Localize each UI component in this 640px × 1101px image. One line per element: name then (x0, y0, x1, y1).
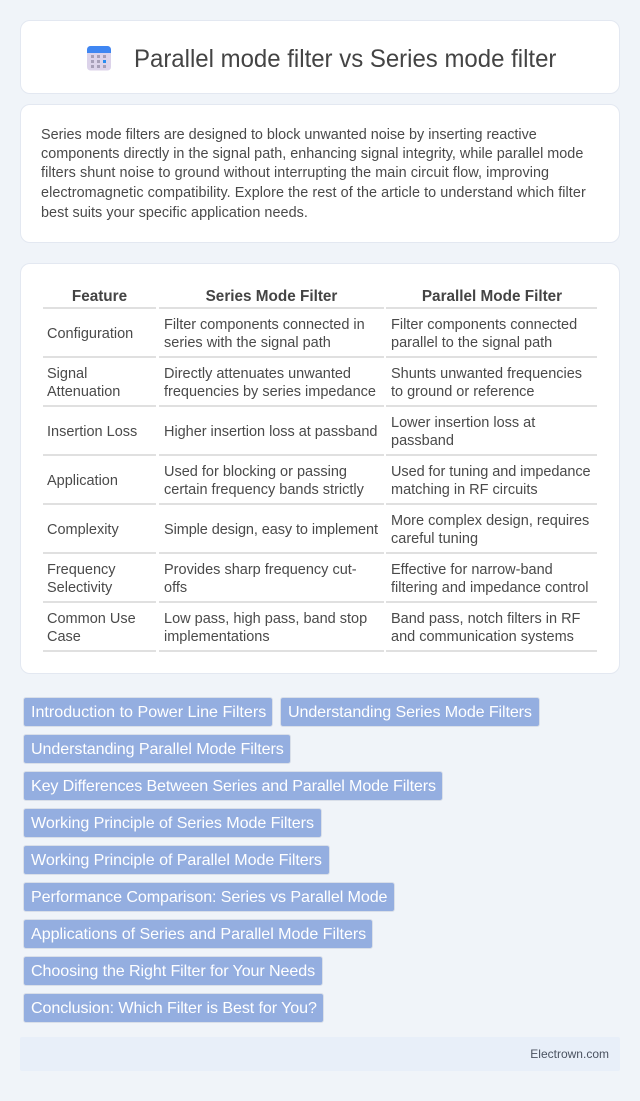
text: Insertion Loss (47, 424, 137, 440)
text: components directly in the signal path, enhancing signal integrity, while parallel mode (41, 146, 583, 162)
footer bar (20, 1037, 620, 1071)
text: to ground or reference (391, 384, 534, 400)
text: careful tuning (391, 531, 478, 547)
text: Application (47, 473, 118, 489)
title: Parallel mode filter vs Series mode filter (134, 45, 556, 73)
text: Working Principle of Parallel Mode Filters (31, 851, 322, 869)
text: Higher insertion loss at passband (164, 424, 377, 440)
text: Understanding Parallel Mode Filters (31, 740, 284, 758)
text: Shunts unwanted frequencies (391, 366, 582, 382)
table headers (72, 288, 562, 305)
text: series with the signal path (164, 335, 331, 351)
text: Band pass, notch filters in RF (391, 611, 580, 627)
text: Performance Comparison: Series vs Parallel Mode (31, 888, 387, 906)
text: Parallel Mode Filter (422, 288, 562, 305)
text: electromagnetic compatibility. Explore the rest of the article to understand which filter (41, 185, 586, 201)
text: Simple design, easy to implement (164, 522, 378, 538)
table rules (43, 307, 597, 652)
panel: comparison table (20, 263, 620, 674)
text: Configuration (47, 326, 133, 342)
text: filters shunt noise to ground without interrupting the main circuit flow, improving (41, 165, 549, 181)
text: Filter components connected (391, 317, 577, 333)
text: Introduction to Power Line Filters (31, 703, 266, 721)
text: matching in RF circuits (391, 482, 538, 498)
text: Low pass, high pass, band stop (164, 611, 367, 627)
text: passband (391, 433, 454, 449)
panel: intro (20, 104, 620, 243)
text: Series Mode Filter (206, 288, 337, 305)
topic tag list (23, 697, 540, 1023)
text: Feature (72, 288, 127, 305)
table row: Insertion Loss (47, 415, 536, 449)
text: Key Differences Between Series and Parallel Mode Filters (31, 777, 436, 795)
text: Lower insertion loss at (391, 415, 535, 431)
text: certain frequency bands strictly (164, 482, 364, 498)
table row: Signal Attenuation (47, 366, 582, 400)
text: Frequency (47, 562, 116, 578)
text: Attenuation (47, 384, 120, 400)
text: Applications of Series and Parallel Mode Filters (31, 925, 366, 943)
text: offs (164, 580, 187, 596)
text: parallel to the signal path (391, 335, 552, 351)
text: Used for blocking or passing (164, 464, 347, 480)
text: Case (47, 629, 81, 645)
text: More complex design, requires (391, 513, 589, 529)
text: Understanding Series Mode Filters (288, 703, 532, 721)
text: frequencies by series impedance (164, 384, 376, 400)
intro text (41, 127, 586, 221)
footer credit: Electrown.com (530, 1047, 609, 1061)
table row: Application (47, 464, 590, 498)
text: and communication systems (391, 629, 574, 645)
text: Directly attenuates unwanted (164, 366, 351, 382)
text: Common Use (47, 611, 136, 627)
header panel (20, 20, 620, 94)
text: implementations (164, 629, 270, 645)
text: Signal (47, 366, 87, 382)
text: Used for tuning and impedance (391, 464, 590, 480)
text: Series mode filters are designed to block unwanted noise by inserting reactive (41, 127, 537, 143)
table row: Configuration (47, 317, 577, 351)
text: filtering and impedance control (391, 580, 588, 596)
text: Provides sharp frequency cut- (164, 562, 357, 578)
table row: Complexity (47, 513, 589, 547)
text: Complexity (47, 522, 119, 538)
icon: calendar (87, 46, 111, 70)
text: Selectivity (47, 580, 112, 596)
text: best suits your specific application needs. (41, 205, 308, 221)
text: Working Principle of Series Mode Filters (31, 814, 314, 832)
text: Effective for narrow-band (391, 562, 553, 578)
text: Choosing the Right Filter for Your Needs (31, 962, 315, 980)
text: Filter components connected in (164, 317, 365, 333)
text: Conclusion: Which Filter is Best for You? (31, 999, 317, 1017)
table row: Frequency Selectivity (47, 562, 588, 596)
table row: Common Use Case (47, 611, 580, 645)
